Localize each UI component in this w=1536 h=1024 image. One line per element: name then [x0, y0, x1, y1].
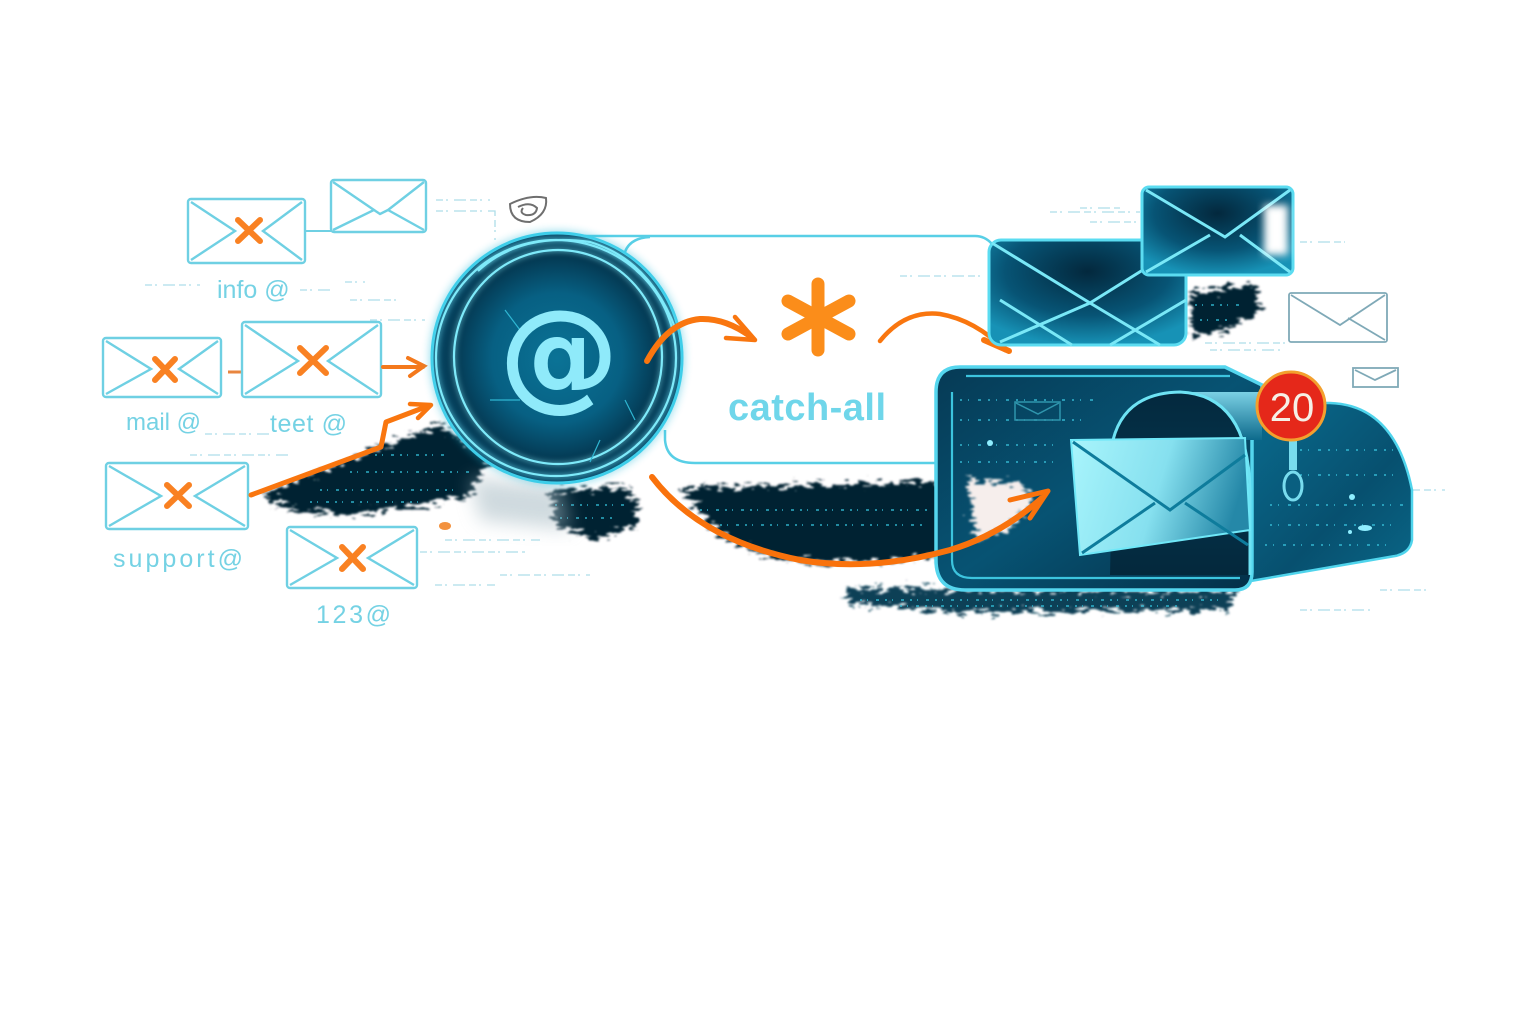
- big envelope: [1071, 438, 1250, 555]
- catch-all panel outline: [585, 236, 992, 463]
- envelope: info: [188, 199, 305, 263]
- at-sign disc: [429, 230, 685, 486]
- mailbox front body: [936, 367, 1262, 590]
- icon: at symbol: @: [499, 285, 619, 424]
- badge: 20: [1257, 372, 1325, 440]
- arrow: asterisk to envelopes: [880, 314, 1009, 351]
- door upper panel: [1180, 392, 1262, 440]
- icon: orange x: [155, 359, 175, 380]
- white patch: [968, 480, 1032, 540]
- envelope: teet: [242, 322, 381, 397]
- arrow: support to at-sign: [251, 404, 431, 495]
- envelope: pale right: [1289, 293, 1387, 342]
- icon: grey swirl: [510, 197, 546, 222]
- connector: [305, 230, 331, 232]
- envelope: dark large: [989, 240, 1186, 345]
- label: catch-all: catch-all: [728, 387, 886, 429]
- icon: orange x: [300, 348, 326, 373]
- mailbox arch: [1110, 392, 1250, 575]
- envelope: 123: [287, 527, 417, 588]
- small inner envelope: [1015, 402, 1060, 420]
- disc scratches: [490, 310, 635, 462]
- envelope: dark small: [1142, 187, 1293, 275]
- icon: orange x: [167, 485, 189, 506]
- orange spark: [439, 522, 451, 530]
- arrow: disc to mailbox: [652, 477, 1048, 564]
- label: mail@: mail @: [126, 409, 201, 436]
- glints: [987, 440, 1372, 534]
- mailbox: [936, 367, 1412, 590]
- icon: orange x: [342, 547, 363, 569]
- envelope: tiny right: [1353, 368, 1398, 387]
- icon: orange x: [238, 220, 260, 241]
- label: info@: info @: [217, 276, 290, 304]
- cyan speckles in smudges: [310, 305, 1245, 606]
- mailbox speckles: [960, 400, 1405, 545]
- faint grey smudge under disc: [470, 478, 570, 530]
- badge: 20: 20: [1270, 386, 1314, 430]
- dash between mail and teet envelopes: [228, 370, 241, 374]
- flag stem: [1289, 432, 1297, 470]
- label: 123@: 123@: [316, 601, 391, 629]
- envelope: support: [106, 463, 248, 529]
- mailbox rear body: [1240, 403, 1412, 582]
- flag loop: [1284, 472, 1302, 500]
- white fade on right edge: [1264, 205, 1288, 255]
- arrow: teet to at-sign: [383, 358, 424, 376]
- arrow: disc to asterisk: [647, 317, 755, 361]
- speckle traces: [145, 200, 1445, 610]
- envelope: mail: [103, 338, 221, 397]
- label: teet@: teet @: [270, 410, 347, 438]
- icon: asterisk: [788, 284, 849, 350]
- label: support@: support@: [113, 545, 243, 573]
- envelope: top, no mark: [331, 180, 426, 232]
- dark smudges: [262, 285, 1262, 612]
